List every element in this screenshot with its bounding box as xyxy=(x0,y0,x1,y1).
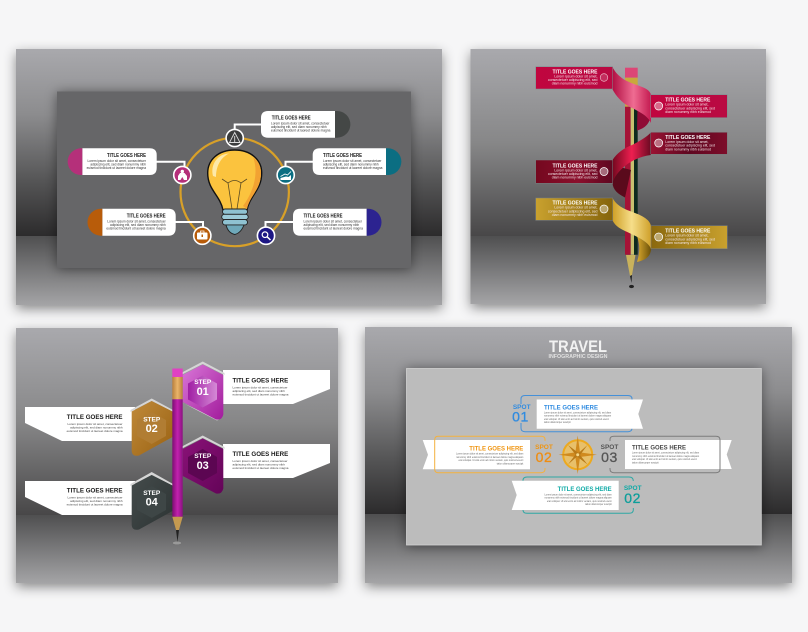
card: spot 02 orange: TITLE GOES HERE xyxy=(469,446,523,452)
icon: top triangle xyxy=(226,129,243,147)
hexagon: step 03: 03 xyxy=(197,460,209,472)
banner 5: diam nonummy nibh euismod xyxy=(552,213,598,217)
step 4 label: adipiscing elit, sed diam nonummy nibh xyxy=(70,499,123,503)
title: INFOGRAPHIC DESIGN xyxy=(548,354,608,360)
banner 3: Lorem ipsum dolor sit amet, xyxy=(665,140,709,144)
callout: right upper: Lorem ipsum dolor sit amet, consectetuer xyxy=(323,159,382,163)
icon: magnifier xyxy=(257,227,275,244)
card: spot 01 blue: SPOT xyxy=(513,404,531,411)
icon: briefcase xyxy=(194,227,211,244)
banner 4: Lorem ipsum dolor sit amet, xyxy=(554,168,598,172)
callout: left upper xyxy=(68,148,157,175)
banner 4: TITLE GOES HERE xyxy=(552,163,598,169)
banner 3: TITLE GOES HERE xyxy=(665,135,711,141)
banner 4: diam nonummy nibh euismod xyxy=(552,176,598,180)
card: spot 02 teal: Lorem ipsum dolor sit amet, consectetuer adipiscing elit, sed diam xyxy=(545,493,612,496)
banner 2 xyxy=(651,95,727,118)
banner 1: diam nonummy nibh euismod xyxy=(552,82,598,86)
banner 4 xyxy=(536,160,613,183)
banner 4: consectetuer adipiscing elit, sed xyxy=(548,172,598,176)
banner 5 xyxy=(536,198,613,220)
ribbon: rose xyxy=(612,67,651,130)
card: spot 02 teal: erat volutpat. Ut wisi enim ad minim veniam, quis nostrud exerci xyxy=(547,500,612,503)
ribbon: gold xyxy=(612,198,651,262)
card: spot 02 orange xyxy=(423,436,553,473)
step 2 label: Lorem ipsum dolor sit amet, consectetuer xyxy=(67,422,122,426)
step 3 label: TITLE GOES HERE xyxy=(232,451,288,458)
step 2 label: euismod tincidunt ut laoreet dolore magna xyxy=(67,429,123,433)
banner 5: consectetuer adipiscing elit, sed xyxy=(548,209,598,213)
card: spot 03 grey: 03 xyxy=(601,449,618,465)
callout: right upper xyxy=(313,148,401,175)
callout: left upper: euismod tincidunt ut laoreet dolore magna xyxy=(87,166,146,170)
callout: right upper: TITLE GOES HERE xyxy=(323,153,362,159)
icon: people xyxy=(174,166,191,184)
step 3 label xyxy=(223,444,330,478)
card: spot 02 orange: tation ullamcorper suscipit xyxy=(497,462,524,465)
panel: ribbon pencil infographic xyxy=(470,49,766,304)
card: spot 02 teal xyxy=(512,477,642,513)
callout: right lower: adipiscing elit, sed diam nonummy nibh xyxy=(304,223,359,227)
banner 2: Lorem ipsum dolor sit amet, xyxy=(665,103,709,107)
card: spot 03 grey: SPOT xyxy=(601,444,618,451)
card: spot 01 blue: erat volutpat. Ut wisi enim ad minim veniam, quis nostrud exerci xyxy=(544,418,609,421)
callout: top: TITLE GOES HERE xyxy=(272,116,311,122)
banner 6: TITLE GOES HERE xyxy=(665,229,711,235)
hexagon: step 01: STEP xyxy=(194,379,212,386)
step 1 label: adipiscing elit, sed diam nonummy nibh xyxy=(232,389,285,393)
hexagon: step 02 xyxy=(130,398,173,456)
card: spot 01 blue: 01 xyxy=(512,409,529,425)
panel: light bulb infographic xyxy=(16,49,442,305)
dark inner board xyxy=(57,92,411,268)
callout: right upper: adipiscing elit, sed diam nonummy nibh xyxy=(323,162,379,166)
hexagon: step 04 xyxy=(130,472,173,530)
card: spot 02 teal: TITLE GOES HERE xyxy=(558,487,612,493)
step 1 label xyxy=(223,370,330,404)
banner 3 xyxy=(651,132,727,154)
banner 3: consectetuer adipiscing elit, sed xyxy=(665,144,715,148)
callout: left upper: Lorem ipsum dolor sit amet, consectetuer xyxy=(88,159,147,163)
card: spot 02 orange: 02 xyxy=(536,449,552,465)
banner 6 xyxy=(651,226,727,249)
card: spot 03 grey: Lorem ipsum dolor sit amet, consectetuer adipiscing elit, sed diam xyxy=(632,452,699,454)
hexagon: step 01 xyxy=(181,362,224,420)
card: spot 01 blue: TITLE GOES HERE xyxy=(544,406,598,412)
card: spot 02 teal: nonummy nibh euismod tincidunt ut laoreet dolore magna aliquam xyxy=(545,496,612,500)
step 4 label xyxy=(25,481,135,515)
banner 2: TITLE GOES HERE xyxy=(665,98,711,104)
callout: right lower: euismod tincidunt ut laoreet dolore magna xyxy=(304,226,363,230)
hexagon: step 01: 01 xyxy=(197,386,209,398)
step 2 label xyxy=(25,407,135,441)
banner 6: consectetuer adipiscing elit, sed xyxy=(665,237,715,241)
callout: top: adipiscing elit, sed diam nonummy nibh xyxy=(271,125,327,129)
banner 5: Lorem ipsum dolor sit amet, xyxy=(554,206,598,210)
callout: right lower: Lorem ipsum dolor sit amet, consectetuer xyxy=(304,220,363,224)
pencil xyxy=(172,368,183,545)
callout: top: euismod tincidunt ut laoreet dolore magna xyxy=(271,128,331,132)
card: spot 02 orange: erat volutpat. Ut wisi enim ad minim veniam, quis nostrud exerci xyxy=(458,459,524,462)
card: spot 03 grey: tation ullamcorper suscipit xyxy=(632,461,659,464)
hexagon: step 04: STEP xyxy=(143,490,161,497)
step 3 label: euismod tincidunt ut laoreet dolore magna xyxy=(232,466,289,470)
hexagon: step 03: STEP xyxy=(194,453,212,460)
step 3 label: adipiscing elit, sed diam nonummy nibh xyxy=(232,462,285,466)
hexagon: step 03 xyxy=(181,436,224,494)
step 4 label: TITLE GOES HERE xyxy=(67,488,122,494)
card: spot 02 orange: nonummy nibh euismod tincidunt ut laoreet dolore magna aliquam xyxy=(456,456,523,459)
callout: left upper: TITLE GOES HERE xyxy=(107,153,146,159)
card: spot 03 grey: TITLE GOES HERE xyxy=(632,446,686,452)
pencil xyxy=(625,68,638,288)
callout: top xyxy=(261,111,350,138)
card: spot 02 teal: SPOT xyxy=(624,485,642,492)
banner 1: consectetuer adipiscing elit, sed xyxy=(548,78,598,82)
callout: left lower: TITLE GOES HERE xyxy=(127,214,166,220)
card: spot 03 grey xyxy=(601,436,732,473)
callout: left lower: Lorem ipsum dolor sit amet, consectetuer xyxy=(107,220,167,224)
callout: right lower: TITLE GOES HERE xyxy=(304,214,343,220)
hexagon: step 02: STEP xyxy=(143,416,161,423)
card: spot 02 orange: SPOT xyxy=(535,444,553,451)
step 2 label: TITLE GOES HERE xyxy=(67,414,122,421)
card: spot 02 teal: tation ullamcorper suscipit xyxy=(585,503,612,506)
card: spot 01 blue: Lorem ipsum dolor sit amet, consectetuer adipiscing elit, sed diam xyxy=(544,412,611,414)
ribbon: crimson xyxy=(612,132,651,198)
banner 1: TITLE GOES HERE xyxy=(552,69,598,75)
title: TRAVEL xyxy=(549,337,607,356)
callout: left lower xyxy=(88,209,176,236)
icon: light bulb xyxy=(208,150,262,234)
banner 1: Lorem ipsum dolor sit amet, xyxy=(554,74,598,78)
step 4 label: euismod tincidunt ut laoreet dolore magna xyxy=(67,502,123,506)
card: spot 01 blue: nonummy nibh euismod tincidunt ut laoreet dolore magna aliquam xyxy=(544,414,611,418)
icon: chart xyxy=(277,166,294,184)
banner 3: diam nonummy nibh euismod xyxy=(665,147,711,151)
card: spot 03 grey: nonummy nibh euismod tincidunt ut laoreet dolore magna aliquam xyxy=(632,455,699,458)
icon: compass xyxy=(558,436,597,474)
banner 1 xyxy=(536,67,613,89)
step 3 label: Lorem ipsum dolor sit amet, consectetuer xyxy=(232,459,288,463)
light inner board xyxy=(406,368,761,545)
panel: travel infographic xyxy=(365,327,792,583)
hexagon: step 02: 02 xyxy=(146,423,158,435)
step 2 label: adipiscing elit, sed diam nonummy nibh xyxy=(70,426,123,430)
card: spot 02 teal: 02 xyxy=(624,490,641,506)
banner 2: consectetuer adipiscing elit, sed xyxy=(665,106,715,110)
panel: step pencil infographic xyxy=(16,328,338,583)
banner 6: Lorem ipsum dolor sit amet, xyxy=(665,234,709,238)
gold ring xyxy=(180,138,289,246)
card: spot 03 grey: erat volutpat. Ut wisi enim ad minim veniam, quis nostrud exerci xyxy=(632,458,697,461)
callout: top: Lorem ipsum dolor sit amet, consectetuer xyxy=(271,122,330,126)
banner 5: TITLE GOES HERE xyxy=(552,201,598,207)
card: spot 01 blue xyxy=(512,396,643,432)
banner 2: diam nonummy nibh euismod xyxy=(665,110,711,114)
step 1 label: TITLE GOES HERE xyxy=(232,378,288,384)
hexagon: step 04: 04 xyxy=(146,496,159,508)
callout: left lower: adipiscing elit, sed diam nonummy nibh xyxy=(110,223,166,227)
callout: left upper: adipiscing elit, sed diam nonummy nibh xyxy=(90,162,146,166)
banner 6: diam nonummy nibh euismod xyxy=(665,241,711,245)
step 4 label: Lorem ipsum dolor sit amet, consectetuer xyxy=(67,496,122,500)
callout: left lower: euismod tincidunt ut laoreet dolore magna xyxy=(106,226,166,230)
card: spot 02 orange: Lorem ipsum dolor sit amet, consectetuer adipiscing elit, sed diam xyxy=(456,452,523,456)
step 1 label: Lorem ipsum dolor sit amet, consectetuer xyxy=(232,386,288,390)
step 1 label: euismod tincidunt ut laoreet dolore magna xyxy=(232,392,289,396)
callout: right lower xyxy=(293,209,382,236)
callout: right upper: euismod tincidunt ut laoreet dolore magna xyxy=(323,166,383,170)
card: spot 01 blue: tation ullamcorper suscipit xyxy=(544,421,571,424)
connectors xyxy=(156,124,313,232)
